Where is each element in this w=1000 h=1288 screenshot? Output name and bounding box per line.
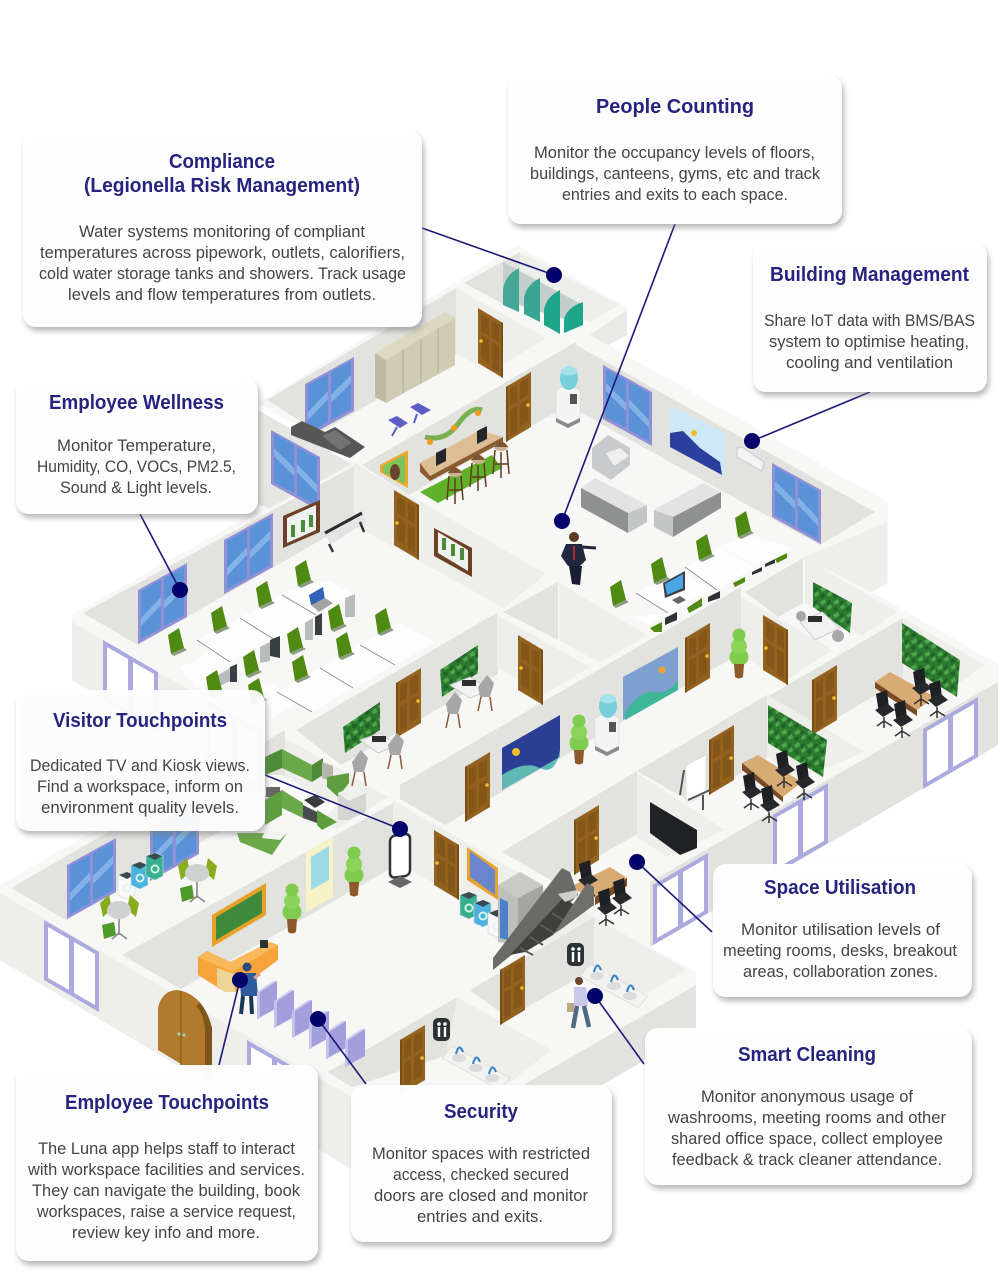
heading: compliance: Compliance — [169, 151, 275, 173]
heading: employee touchpoints: Employee Touchpoints — [65, 1092, 269, 1114]
icon: person standing — [561, 532, 596, 585]
heading: compliance — [84, 151, 360, 197]
icon: green mat — [420, 455, 502, 503]
icon: green wave picture — [623, 647, 678, 720]
text: employee wellness body — [37, 437, 236, 497]
icon: navy wave picture — [502, 715, 560, 790]
heading: security: Security — [444, 1101, 519, 1123]
text: visitor touchpoints body: environment quality levels. — [41, 799, 239, 817]
heading: visitor touchpoints: Visitor Touchpoints — [53, 710, 227, 732]
panel: employee touchpoints — [16, 1065, 318, 1261]
text: people counting body: Monitor the occupancy levels of floors, — [534, 144, 815, 162]
chart: office desks left — [180, 580, 435, 728]
text: compliance body: levels and flow temperatures from outlets. — [68, 286, 376, 304]
icon: desktop monitor — [663, 571, 686, 604]
text: employee touchpoints body — [27, 1140, 305, 1242]
text: smart cleaning body — [667, 1088, 947, 1169]
icon: meeting tables — [568, 672, 935, 905]
text: smart cleaning body: feedback & track cleaner attendance. — [672, 1151, 942, 1169]
connector: visitor touchpoints — [265, 775, 408, 837]
icon: washroom signs — [433, 943, 584, 1041]
panel: compliance — [23, 131, 422, 327]
text: employee wellness body: Sound & Light levels. — [60, 479, 212, 497]
icon: wall TV — [650, 802, 697, 855]
text: smart cleaning body: shared office space, collect employee — [671, 1130, 943, 1148]
text: space utilisation body: areas, collaboration zones. — [743, 963, 938, 981]
text: visitor touchpoints body — [30, 757, 250, 817]
icon: recycling bins left — [118, 853, 163, 899]
icon: cleaner person — [567, 977, 589, 1028]
text: building management body: cooling and ventilation — [786, 354, 953, 372]
icon: reception desk — [198, 940, 278, 992]
chart: office desks right — [630, 535, 794, 632]
icon: security guard — [239, 962, 260, 1014]
icon: plant walls — [343, 582, 960, 777]
panel: employee wellness — [16, 378, 258, 514]
text: security body: doors are closed and monitor — [374, 1187, 589, 1205]
building footprint — [0, 245, 998, 1198]
panel: space utilisation — [713, 864, 972, 997]
text: building management body: system to optimise heating, — [769, 333, 969, 351]
icon: laptop — [309, 587, 333, 612]
connector: employee wellness — [140, 514, 188, 598]
icon: escalator — [493, 868, 594, 970]
connector: smart cleaning — [587, 988, 644, 1064]
connector: building management — [744, 392, 870, 449]
icon: wall picture shelf right — [434, 528, 472, 577]
icon: large printer — [325, 513, 366, 552]
text: compliance body: temperatures across pipework, outlets, calorifiers, — [40, 244, 405, 262]
text: space utilisation body — [723, 921, 957, 981]
text: compliance body: Water systems monitoring of compliant — [79, 223, 365, 241]
icon: turnstiles — [257, 981, 365, 1067]
text: security body: entries and exits. — [417, 1208, 543, 1226]
icon: sinks — [442, 964, 648, 1090]
doors — [394, 308, 837, 1095]
text: space utilisation body: meeting rooms, desks, breakout — [723, 942, 957, 960]
icon: garland — [425, 409, 482, 445]
text: people counting body: buildings, canteens, gyms, etc and track — [530, 165, 821, 183]
text: visitor touchpoints body: Dedicated TV and Kiosk views. — [30, 757, 250, 775]
text: people counting body: entries and exits to each space. — [562, 186, 788, 204]
text: employee touchpoints body: review key info and more. — [72, 1224, 260, 1242]
icon: recycling bins right — [460, 892, 505, 937]
text: compliance body — [39, 223, 406, 304]
text: employee touchpoints body: workspaces, raise a service request, — [36, 1203, 296, 1221]
text: security body: access, checked secured — [393, 1166, 569, 1184]
icon: landscape picture navy — [670, 405, 725, 475]
icon: framed picture blue — [467, 847, 498, 900]
connector: compliance — [422, 228, 562, 283]
text: employee touchpoints body: with workspace facilities and services. — [27, 1161, 305, 1179]
panel: building management — [753, 243, 987, 392]
kitchen area — [237, 749, 366, 855]
icon: water cooler 2 — [595, 694, 619, 756]
icon: wall picture shelf left — [283, 500, 320, 548]
heading: building management: Building Management — [770, 264, 969, 286]
text: smart cleaning body: washrooms, meeting rooms and other — [667, 1109, 947, 1127]
icon: topiaries — [282, 628, 748, 934]
icon: armchair — [592, 435, 630, 480]
heading: employee wellness: Employee Wellness — [49, 392, 224, 414]
text: employee wellness body: Humidity, CO, VOCs, PM2.5, — [37, 458, 236, 476]
text: visitor touchpoints body: Find a workspace, inform on — [37, 778, 243, 796]
heading: smart cleaning: Smart Cleaning — [738, 1044, 876, 1066]
text: security body: Monitor spaces with restricted — [372, 1145, 590, 1163]
panel: visitor touchpoints — [16, 690, 265, 831]
connector: people counting — [554, 224, 675, 529]
icon: green office chairs right — [610, 511, 754, 608]
outer wall faces — [0, 310, 998, 1198]
text: building management body — [764, 312, 975, 372]
icon: sofa left — [581, 478, 647, 533]
text: building management body: Share IoT data with BMS/BAS — [764, 312, 975, 330]
connector: security — [310, 1011, 366, 1084]
text: people counting body — [530, 144, 821, 204]
icon: black chairs — [578, 668, 948, 926]
icon: canteen bench — [420, 426, 503, 481]
text: security body — [372, 1145, 590, 1226]
callout connector lines and dots — [140, 224, 870, 1084]
icon: flipchart whiteboard — [680, 755, 710, 810]
icon: arched main door — [158, 990, 212, 1083]
text: employee touchpoints body: They can navigate the building, book — [32, 1182, 301, 1200]
heading: space utilisation: Space Utilisation — [764, 877, 916, 899]
connector: space utilisation — [629, 854, 712, 932]
icon: kiosk — [388, 833, 412, 888]
text: smart cleaning body: Monitor anonymous usage of — [701, 1088, 913, 1106]
panel: security — [351, 1085, 612, 1242]
panel: people counting — [508, 75, 842, 224]
heading: people counting: People Counting — [596, 96, 754, 118]
windows — [44, 357, 978, 1132]
icon: purple stools — [388, 403, 431, 436]
icon: green office chairs left — [168, 560, 394, 706]
text: compliance body: cold water storage tanks and showers. Track usage — [39, 265, 406, 283]
icon: bar stools — [447, 442, 509, 504]
icon: glass door — [306, 837, 333, 912]
text: employee wellness body: Monitor Temperature, — [57, 437, 216, 455]
building floor plan — [0, 245, 998, 1198]
icon: water cooler — [556, 366, 580, 428]
icon: portrait picture — [380, 450, 408, 488]
icon: cafe tables — [100, 858, 217, 939]
icon: art picture gold frame — [212, 883, 266, 947]
text: space utilisation body: Monitor utilisation levels of — [741, 921, 940, 939]
icon: air conditioning unit — [737, 447, 764, 471]
icon: lockers — [375, 312, 455, 403]
connector: employee touchpoints — [219, 972, 248, 1065]
text: employee touchpoints body: The Luna app helps staff to interact — [38, 1140, 295, 1158]
icon: showers — [503, 262, 583, 334]
inner wall faces — [11, 252, 985, 1087]
icon: small tables — [352, 611, 844, 786]
panel: smart cleaning — [645, 1028, 972, 1185]
icon: sofa right — [654, 483, 721, 537]
heading: compliance: (Legionella Risk Management) — [84, 175, 360, 197]
icon: copier — [291, 421, 365, 458]
icon: lift — [498, 872, 543, 945]
